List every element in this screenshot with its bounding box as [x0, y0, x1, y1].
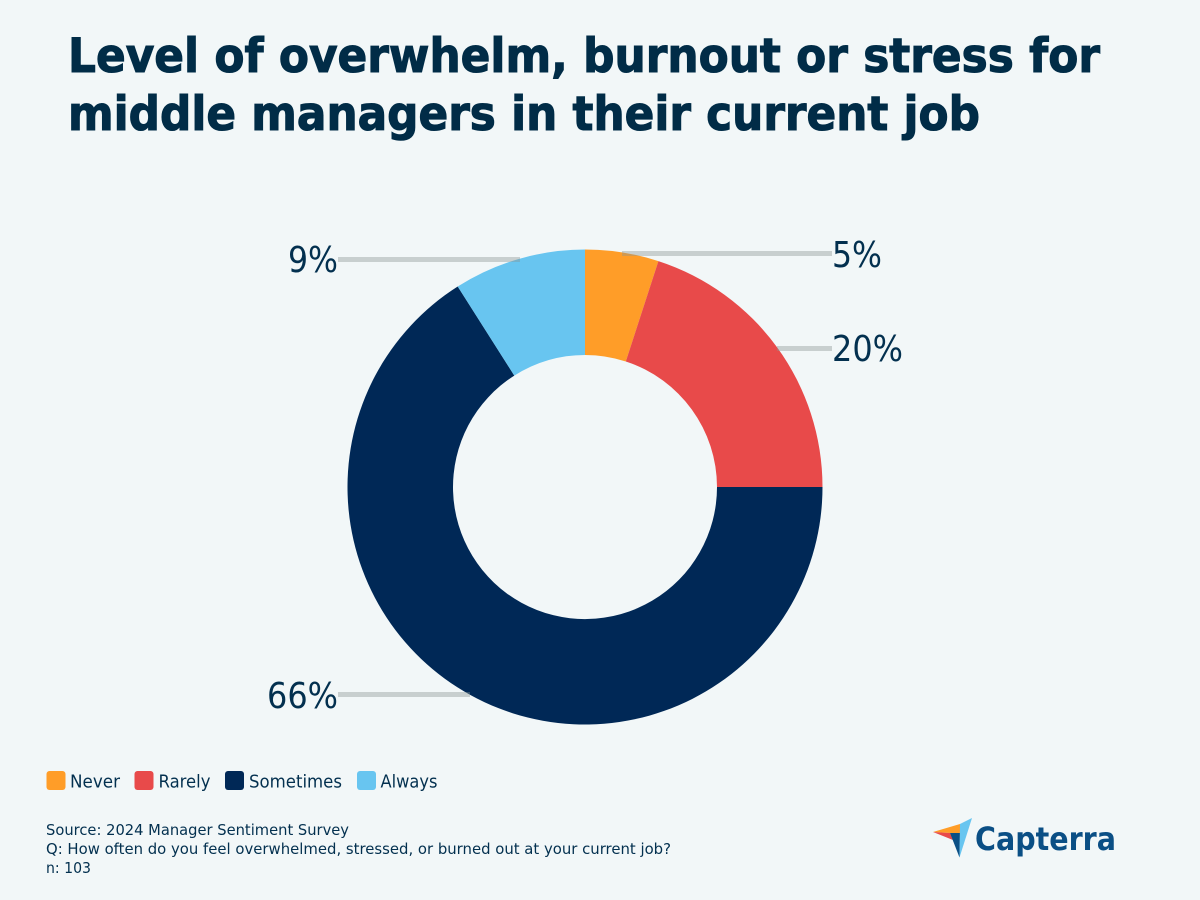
source note: Q: How often do you feel overwhelmed, stressed, or burned out at your current job?	[46, 840, 671, 858]
label: 20%: 20%	[832, 329, 903, 370]
title: Level of overwhelm, burnout or stress for	[68, 29, 1101, 84]
slice: Rarely 20%	[626, 261, 822, 487]
source note: Source: 2024 Manager Sentiment Survey	[46, 821, 349, 839]
legend: Rarely: Rarely	[158, 772, 210, 792]
legend: Never	[46, 771, 121, 792]
title: middle managers in their current job	[68, 87, 980, 142]
Capterra logo: Capterra	[975, 820, 1116, 858]
slice: Sometimes 66%	[347, 286, 822, 725]
leader line: 5%	[622, 251, 832, 256]
leader line: 9%	[338, 257, 520, 262]
legend: Never: Never	[70, 772, 121, 792]
slice: Never 5%	[585, 249, 658, 362]
legend: Sometimes: Sometimes	[249, 772, 342, 792]
label: 5%: 5%	[832, 235, 882, 276]
legend: Always: Always	[380, 772, 438, 792]
leader line: 20%	[777, 346, 832, 351]
slice: Always 9%	[458, 250, 585, 376]
donut chart	[347, 249, 822, 725]
legend: Rarely	[134, 771, 210, 792]
legend	[46, 771, 438, 792]
source note	[46, 821, 671, 877]
legend: Always	[357, 771, 438, 792]
label: 66%: 66%	[267, 676, 338, 717]
source note: n: 103	[46, 859, 91, 877]
Capterra logo	[933, 818, 1116, 858]
label: 9%: 9%	[288, 240, 338, 281]
leader line: 66%	[338, 692, 470, 697]
title	[68, 29, 1101, 142]
icon: Capterra arrow	[933, 818, 972, 858]
